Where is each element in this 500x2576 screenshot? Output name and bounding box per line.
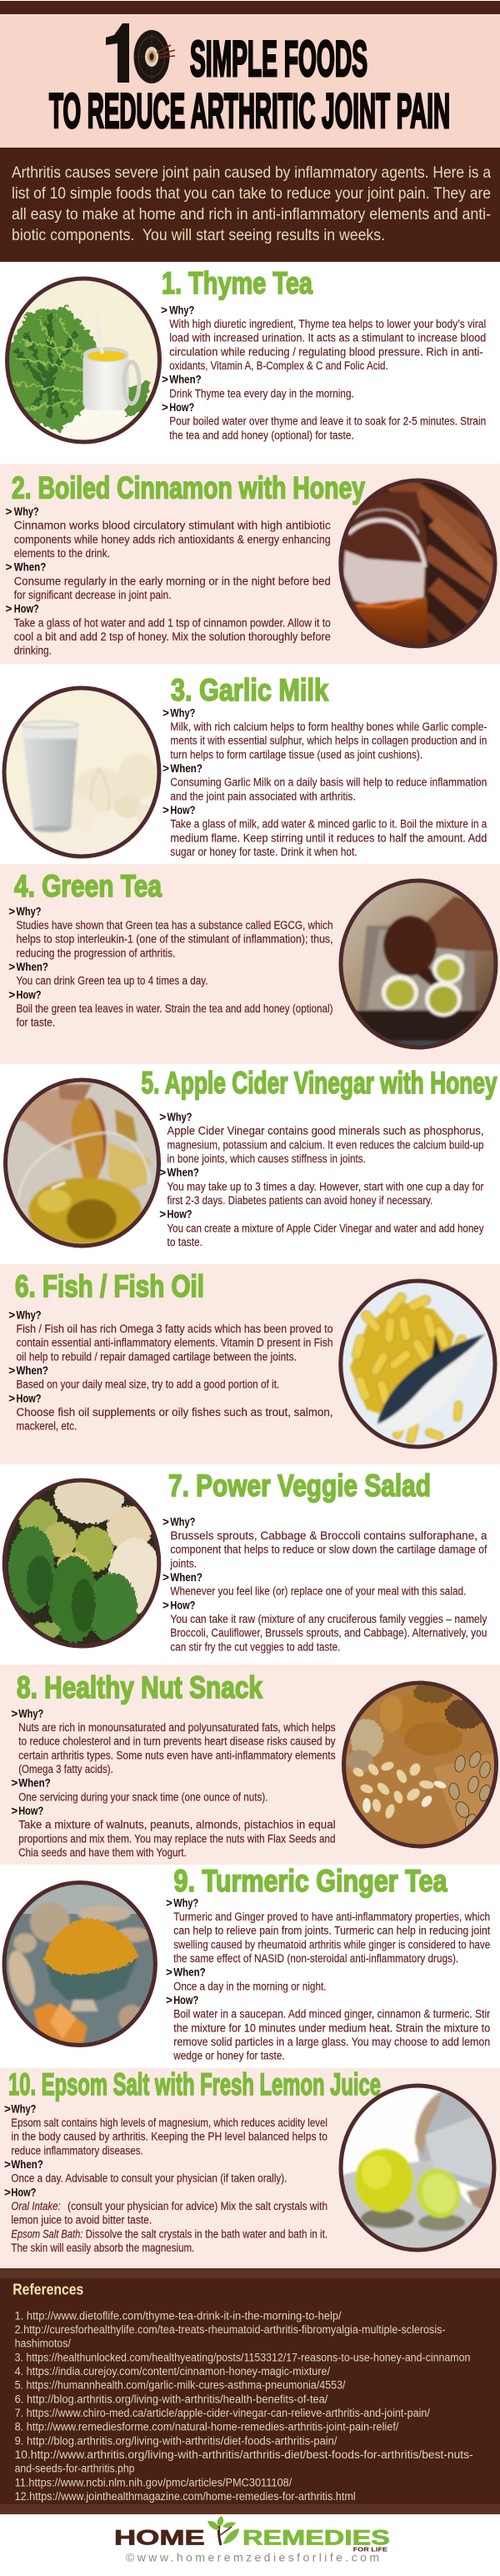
text: why when how: Chia seeds and have them with Yogurt.: [18, 1846, 187, 1859]
heading: 6. Fish / Fish Oil: [15, 1269, 204, 1303]
text: why when how: >: [166, 1966, 172, 1979]
text: why when how: medium flame. Keep stirring until it reduces to half the amount. Add: [170, 831, 487, 844]
title block: [49, 23, 450, 138]
text: why when how: Why?: [167, 1111, 192, 1123]
text: why when how: in bone joints, which causes stiffness in joints.: [167, 1152, 366, 1165]
text: why when how: >: [11, 1707, 18, 1720]
text: why when how: >: [162, 1599, 169, 1611]
text: why when how: >: [159, 1167, 166, 1179]
text: why when how: When?: [170, 1571, 202, 1584]
text: why when how: >: [162, 804, 169, 816]
text: why when how: When?: [169, 374, 202, 386]
image: turmeric powder bowl and ginger: [0, 1881, 162, 2047]
text: why when how: You can drink Green tea up to 4 times a day.: [17, 975, 208, 987]
website url: ©www.homeremzediesforlife.com: [126, 2551, 379, 2564]
image: lemon and epsom salt: [338, 2082, 500, 2256]
text: why when how: How?: [18, 1805, 43, 1817]
text: why when how: Why?: [18, 1707, 43, 1720]
text: why when how: [166, 1896, 491, 2062]
text: why when how: How?: [14, 603, 39, 615]
text: why when how: The skin will easily absorb the magnesium.: [11, 2242, 194, 2254]
text: why when how: When?: [17, 1364, 48, 1377]
text: why when how: Take a glass of hot water and add 1 tsp of cinnamon powder. Allow it to: [14, 616, 331, 629]
text: why when how: How?: [17, 988, 42, 1001]
text: why when how: Based on your daily meal size, try to add a good portion of it.: [17, 1378, 279, 1391]
text: why when how: for taste.: [17, 1017, 55, 1029]
text: why when how: first 2-3 days. Diabetes patients can avoid honey if necessary.: [167, 1194, 432, 1207]
panel: intro: biotic components. You will start seeing results in weeks.: [12, 227, 385, 244]
text: why when how: drinking.: [14, 645, 52, 657]
text: why when how: Dissolve the salt crystals in the bath water and bath in it.: [86, 2227, 328, 2240]
image: broccoli, sprouts and cauliflower: [0, 1470, 162, 1651]
references list: 9. http://blog.arthritis.org/living-with-arthritis/diet-foods-arthritis-pain/: [15, 2434, 338, 2447]
text: why when how: Why?: [169, 304, 194, 316]
image: cinnamon sticks and honey glass: [338, 477, 500, 659]
panel: 6 Fish / Fish Oil: [0, 1264, 500, 1464]
text: why when how: >: [162, 762, 169, 775]
references list: and-seeds-for-arthritis.php: [15, 2463, 134, 2475]
text: why when how: How?: [173, 1994, 198, 2006]
heading: 2. Boiled Cinnamon with Honey: [12, 471, 365, 505]
image: teapot pouring green tea: [338, 877, 500, 1051]
text: why when how: can stir fry the cut veggies to add taste.: [170, 1640, 340, 1653]
text: why when how: >: [162, 374, 168, 386]
references list: 10.http://www.arthritis.org/living-with-arthritis/arthritis-diet/best-foods-for-arthritis/best-nuts-: [15, 2448, 473, 2461]
references list: 11.https://www.ncbi.nlm.nih.gov/pmc/articles/PMC3011108/: [15, 2476, 292, 2488]
text: why when how: to taste.: [167, 1236, 202, 1248]
text: why when how: >: [162, 706, 169, 719]
text: why when how: >: [159, 1208, 166, 1221]
text: why when how: contain essential anti-inflammatory elements. Vitamin D present in Fish: [17, 1337, 333, 1349]
panel: 8 Healthy Nut Snack: [0, 1665, 500, 1865]
logo tagline: FOR LIFE: [353, 2545, 388, 2553]
text: why when how: [11, 1707, 336, 1859]
heading: 8. Healthy Nut Snack: [17, 1670, 262, 1705]
text: why when how: Nuts are rich in monounsaturated and polyunsaturated fats, which helps: [18, 1721, 336, 1734]
text: why when how: [8, 905, 333, 1029]
text: why when how: load with increased urination. It acts as a stimulant to increase blood: [169, 332, 486, 344]
text: why when how: >: [8, 1392, 15, 1404]
text: why when how: >: [162, 1515, 169, 1528]
text: why when how: reduce inflammatory diseases.: [11, 2144, 143, 2157]
text: why when how: When?: [14, 561, 46, 574]
footer logo: [114, 2516, 390, 2564]
text: why when how: cool a bit and add 2 tsp of honey. Mix the solution thoroughly before: [14, 630, 331, 643]
text: why when how: >: [5, 561, 12, 574]
panel: 9 Turmeric Ginger Tea: [0, 1864, 491, 2062]
text: why when how: reducing the progression of arthritis.: [17, 947, 175, 959]
text: why when how: Why?: [17, 905, 42, 917]
references list: 1. http://www.dietoflife.com/thyme-tea-drink-it-in-the-morning-to-help/: [15, 2309, 342, 2322]
references list: 8. http://www.remediesforme.com/natural-home-remedies-arthritis-joint-pain-relief/: [15, 2421, 399, 2433]
heading: 9. Turmeric Ginger Tea: [173, 1864, 448, 1898]
text: why when how: Epsom salt contains high levels of magnesium, which reduces acidity level: [11, 2117, 328, 2129]
text: why when how: Why?: [170, 1515, 195, 1528]
text: why when how: Whenever you feel like (or) replace one of your meal with this salad.: [170, 1585, 466, 1598]
text: why when how: Apple Cider Vinegar contains good minerals such as phosphorus,: [167, 1125, 483, 1137]
text: why when how: [5, 505, 331, 657]
references list: 6. http://blog.arthritis.org/living-with-arthritis/health-benefits-of-tea/: [15, 2393, 328, 2405]
panel: references: [0, 2268, 500, 2514]
text: why when how: When?: [11, 2158, 43, 2171]
text: why when how: Choose fish oil supplements or oily fishes such as trout, salmon,: [17, 1406, 333, 1419]
text: why when how: >: [166, 1896, 172, 1909]
image: glass of milk and garlic: [0, 684, 162, 859]
text: why when how: Why?: [173, 1896, 198, 1909]
text: why when how: circulation while reducing / regulating blood pressure. Rich in anti-: [169, 345, 483, 358]
references list: hashimotos/: [15, 2337, 71, 2350]
text: why when how: How?: [167, 1208, 192, 1221]
text: why when how: How?: [17, 1392, 42, 1404]
text: why when how: oil help to rebuild / repair damaged cartilage between the joints.: [17, 1350, 297, 1363]
text: why when how: When?: [167, 1167, 199, 1179]
text: why when how: [4, 2102, 328, 2254]
text: why when how: to reduce cholesterol and in turn prevents heart disease risks caused by: [18, 1735, 336, 1748]
text: why when how: helps to stop interleukin-1 (one of the stimulant of inflammation); thus,: [17, 933, 333, 946]
text: why when how: >: [11, 1777, 18, 1790]
text: why when how: [159, 1111, 484, 1248]
text: why when how: >: [8, 905, 15, 917]
text: why when how: mackerel, etc.: [17, 1420, 77, 1433]
text: why when how: When?: [173, 1966, 206, 1979]
text: why when how: Drink Thyme tea every day in the morning.: [169, 387, 354, 399]
text: why when how: the tea and add honey (optional) for taste.: [169, 429, 354, 441]
references list: [15, 2309, 473, 2503]
text: why when how: How?: [170, 804, 195, 816]
text: why when how: >: [8, 1308, 15, 1321]
text: why when how: in the body caused by arthritis. Keeping the PH level balanced helps to: [11, 2131, 328, 2143]
image: thyme and mug of tea: [4, 275, 162, 446]
text: why when how: One servicing during your snack time (one ounce of nuts).: [18, 1790, 268, 1803]
text: why when how: [161, 304, 486, 441]
heading: 7. Power Veggie Salad: [168, 1469, 431, 1503]
text: why when how: sugar or honey for taste. Drink it when hot.: [170, 846, 358, 858]
panel: 1 Thyme Tea: [4, 266, 486, 446]
references list: 2.http://curesforhealthylife.com/tea-treats-rheumatoid-arthritis-fibromyalgia-multiple-sclerosis-: [15, 2323, 446, 2336]
text: why when how: elements to the drink.: [14, 547, 110, 560]
references list: 5. https://humannhealth.com/garlic-milk-cures-asthma-pneumonia/4553/: [15, 2379, 346, 2392]
text: why when how: Why?: [14, 505, 39, 518]
text: why when how: lemon juice to avoid bitter taste.: [11, 2214, 152, 2227]
panel: 2 Boiled Cinnamon with Honey: [0, 464, 500, 664]
text: why when how: Oral Intake:: [11, 2200, 61, 2212]
text: why when how: >: [162, 401, 168, 414]
text: why when how: How?: [169, 401, 194, 414]
text: why when how: When?: [18, 1777, 51, 1790]
text: why when how: [162, 1515, 488, 1653]
text: why when how: Epsom Salt Bath:: [11, 2227, 83, 2240]
image: walnuts, peanuts and pistachios: [338, 1678, 500, 1851]
text: why when how: certain arthritis types. Some nuts even have anti-inflammatory elements: [18, 1749, 336, 1761]
text: why when how: >: [4, 2102, 11, 2115]
logo word HOME: HOME: [114, 2527, 205, 2550]
icon: tree with leaves: [208, 2516, 239, 2545]
text: why when how: >: [8, 961, 15, 973]
heading: 1. Thyme Tea: [162, 266, 312, 300]
panel: intro: [0, 148, 500, 262]
references list: 12.https://www.jointhealthmagazine.com/home-remedies-for-arthritis.html: [15, 2490, 356, 2503]
text: why when how: >: [8, 988, 15, 1001]
text: why when how: (consult your physician for advice) Mix the salt crystals with: [68, 2200, 328, 2212]
text: why when how: >: [5, 505, 12, 518]
text: why when how: joints.: [169, 1557, 197, 1569]
text: why when how: How?: [170, 1599, 195, 1611]
text: why when how: the same effect of NASID (non-steroidal anti-inflammatory drugs).: [173, 1952, 458, 1965]
text: why when how: Fish / Fish oil has rich Omega 3 fatty acids which has been proved to: [17, 1323, 333, 1335]
text: why when how: When?: [170, 762, 202, 775]
text: why when how: and the joint pain associated with arthritis.: [170, 790, 356, 802]
text: why when how: >: [5, 603, 12, 615]
panel: 7 Power Veggie Salad: [0, 1469, 488, 1653]
text: why when how: >: [11, 1805, 18, 1817]
panel: 3 Garlic Milk: [0, 673, 488, 859]
text: why when how: [8, 1308, 333, 1433]
text: why when how: components while honey adds rich antioxidants & energy enhancing: [14, 533, 331, 545]
text: why when how: wedge or honey for taste.: [172, 2050, 285, 2062]
text: why when how: >: [159, 1111, 166, 1123]
text: why when how: [162, 706, 488, 858]
text: why when how: Take a mixture of walnuts, peanuts, almonds, pistachios in equal: [18, 1819, 336, 1831]
text: why when how: turn helps to form cartilage tissue (used as joint cushions).: [170, 748, 422, 761]
text: why when how: Studies have shown that Green tea has a substance called EGCG, which: [17, 919, 333, 931]
image: fish and oil capsules: [338, 1276, 500, 1451]
text: why when how: Once a day in the morning or night.: [173, 1980, 327, 1992]
text: why when how: proportions and mix them. You may replace the nuts with Flax Seeds and: [18, 1832, 336, 1845]
references heading: References: [12, 2282, 83, 2298]
panel: 5 Apple Cider Vinegar with Honey: [0, 1066, 498, 1251]
text: why when how: Brussels sprouts, Cabbage & Broccoli contains sulforaphane, a: [170, 1529, 488, 1542]
text: why when how: Consume regularly in the early morning or in the night before bed: [14, 575, 331, 587]
text: why when how: oxidants, Vitamin A, B-Complex & C and Folic Acid.: [169, 359, 388, 372]
text: why when how: Once a day. Advisable to consult your physician (if taken orally).: [11, 2172, 287, 2185]
heading: 4. Green Tea: [14, 869, 162, 903]
text: why when how: Boil the green tea leaves in water. Strain the tea and add honey (optional): [17, 1002, 333, 1015]
text: why when how: >: [166, 1994, 172, 2006]
text: why when how: >: [161, 304, 168, 316]
text: why when how: >: [8, 1364, 15, 1377]
heading: 3. Garlic Milk: [171, 673, 328, 707]
text: why when how: Why?: [170, 706, 195, 719]
text: why when how: Cinnamon works blood circulatory stimulant with high antibiotic: [14, 520, 331, 532]
panel: 4 Green Tea: [0, 864, 500, 1064]
text: why when how: >: [4, 2158, 11, 2171]
text: why when how: How?: [11, 2186, 36, 2198]
text: why when how: >: [162, 1571, 169, 1584]
image: apple slice dripping honey into glass: [0, 1076, 162, 1251]
text: why when how: (Omega 3 fatty acids).: [18, 1763, 113, 1775]
text: why when how: Why?: [11, 2102, 36, 2115]
icon: number 10 with dartboard zero: [106, 23, 175, 83]
references list: 3. https://healthunlocked.com/healthyeating/posts/1153312/17-reasons-to-use-honey-and-cinnamon: [15, 2351, 470, 2363]
text: why when how: When?: [17, 961, 48, 973]
references list: 4. https://india.curejoy.com/content/cinnamon-honey-magic-mixture/: [15, 2365, 330, 2378]
references list: 7. https://www.chiro-med.ca/article/apple-cider-vinegar-can-relieve-arthritis-and-joint-pain/: [15, 2407, 430, 2419]
text: why when how: for significant decrease in joint pain.: [14, 589, 171, 601]
logo word REMEDIES: REMEDIES: [242, 2527, 390, 2550]
text: why when how: Why?: [17, 1308, 42, 1321]
panel: 10 Epsom Salt with Fresh Lemon Juice: [0, 2067, 500, 2268]
text: why when how: >: [4, 2186, 11, 2198]
